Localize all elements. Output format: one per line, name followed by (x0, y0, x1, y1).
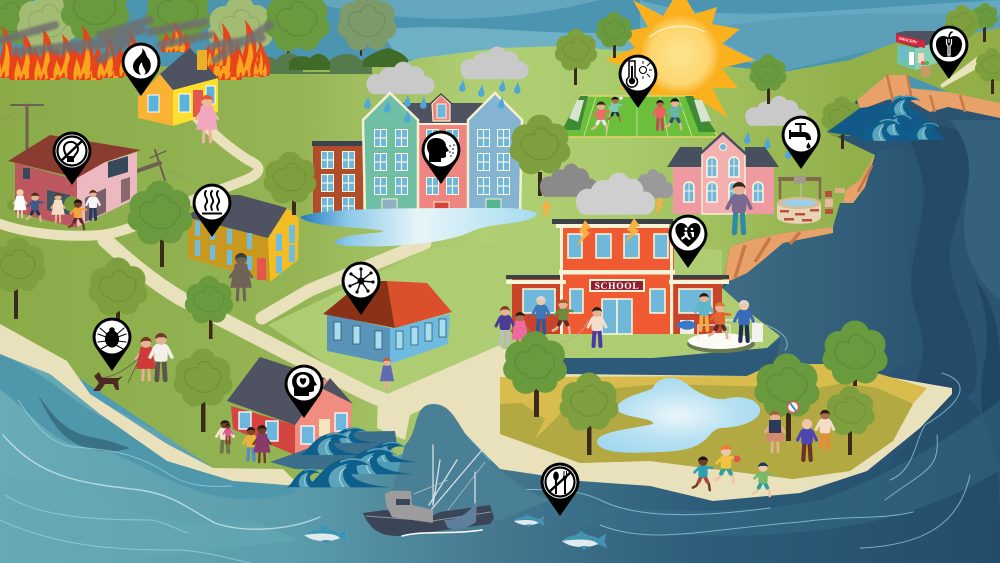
wildfire flames (0, 20, 270, 80)
building: colourful row houses (363, 93, 522, 212)
fish: large (562, 531, 607, 550)
tree: behind yellow lane (264, 152, 316, 215)
map pin: extreme heat (193, 184, 231, 237)
cloud: right rain cloud (460, 47, 529, 79)
tree: upper right middle (945, 5, 979, 38)
tree: by beach (174, 349, 232, 432)
person: woman in headscarf (230, 253, 252, 300)
downed power pole (137, 150, 185, 180)
tree: island east (825, 386, 875, 455)
grocery store (896, 31, 978, 88)
tree: schoolyard (503, 331, 567, 417)
tree: right of sun (749, 54, 787, 104)
map pin: tick (93, 318, 131, 371)
map pin: children's emotional wellbeing (669, 215, 707, 268)
school (506, 219, 729, 334)
people: children running on beach (693, 445, 772, 496)
tree: field upper (596, 12, 632, 58)
person: woman at manor (727, 182, 751, 233)
coastal cliffs (723, 75, 1000, 284)
tree: on eastern cliff (822, 97, 862, 149)
tree: left lane (89, 258, 147, 321)
people: soccer players (592, 96, 684, 131)
people: on merry-go-round (695, 293, 753, 341)
grocery store: GROCERY (898, 37, 918, 45)
school: SCHOOL (595, 282, 639, 292)
house: yellow house (138, 48, 218, 126)
storm clouds and lightning (540, 164, 673, 247)
house: red and salmon house (227, 357, 353, 458)
house: mustard house (186, 195, 299, 282)
house: blue house (323, 281, 452, 364)
fish: near shore (304, 525, 349, 544)
tree: centre left (127, 180, 193, 267)
beach: southern sand and island edge (377, 345, 952, 501)
storm waves: southwest (270, 427, 419, 487)
person: girl by blue house (380, 358, 394, 389)
flood water (300, 208, 537, 246)
tree: upper right (972, 3, 998, 42)
island meadow (500, 364, 927, 479)
fishing boat (363, 445, 494, 536)
person: pregnant woman (196, 95, 218, 142)
tree: far left (0, 237, 46, 319)
map pin: food security (930, 26, 968, 79)
sea current lines (0, 320, 970, 563)
people: island ball game (766, 402, 834, 460)
background trees and bushes (0, 0, 408, 74)
building: pink manor (667, 133, 779, 214)
wildfire smoke (2, 20, 270, 60)
map pin: respiratory illness (422, 131, 460, 184)
beach: western shore (0, 324, 300, 486)
inlet water below school lawn (560, 340, 780, 376)
merry-go-round (676, 320, 763, 353)
storm waves: northeast (827, 96, 950, 141)
background: southern sea (0, 340, 1000, 563)
person group: couple walking dog (93, 333, 172, 391)
land: lighter central lawn (268, 240, 780, 398)
tree: field left (555, 29, 597, 85)
loose bricks (825, 188, 845, 214)
map pin: virus (342, 262, 380, 315)
background: dark eastern sea (560, 100, 1000, 563)
sun (605, 0, 755, 130)
tree: island centre (754, 353, 820, 441)
house: pink house with outage (7, 135, 141, 228)
sandy roads (0, 118, 505, 405)
building: brick apartment (312, 141, 363, 215)
map pin: heat and temperature (619, 55, 657, 108)
rain drops (364, 79, 792, 159)
bay behind the boat (390, 404, 550, 520)
tree: near flooded apartments (510, 115, 570, 196)
background: northern sea (0, 0, 1000, 120)
tree: far right (975, 48, 1000, 94)
tree: lane centre (185, 276, 233, 339)
map pin: fisheries food loss (541, 463, 579, 516)
map pin: wildfire (122, 43, 160, 96)
soccer field (560, 96, 718, 137)
tree: island left (560, 373, 618, 455)
people: children running (14, 189, 100, 229)
people: family huddled (216, 420, 271, 462)
fish: small (514, 514, 545, 527)
map pin: water contamination (782, 116, 820, 169)
people: schoolyard children and adults (496, 296, 606, 349)
island pond (597, 378, 760, 453)
map pin: mental health (285, 365, 323, 418)
village well (777, 176, 821, 224)
tree: island north (822, 320, 888, 386)
utility pole (0, 105, 70, 150)
cloud: left rain cloud (366, 62, 435, 94)
map pin: power outage (53, 132, 91, 185)
cloud: cloud above manor (745, 96, 808, 126)
